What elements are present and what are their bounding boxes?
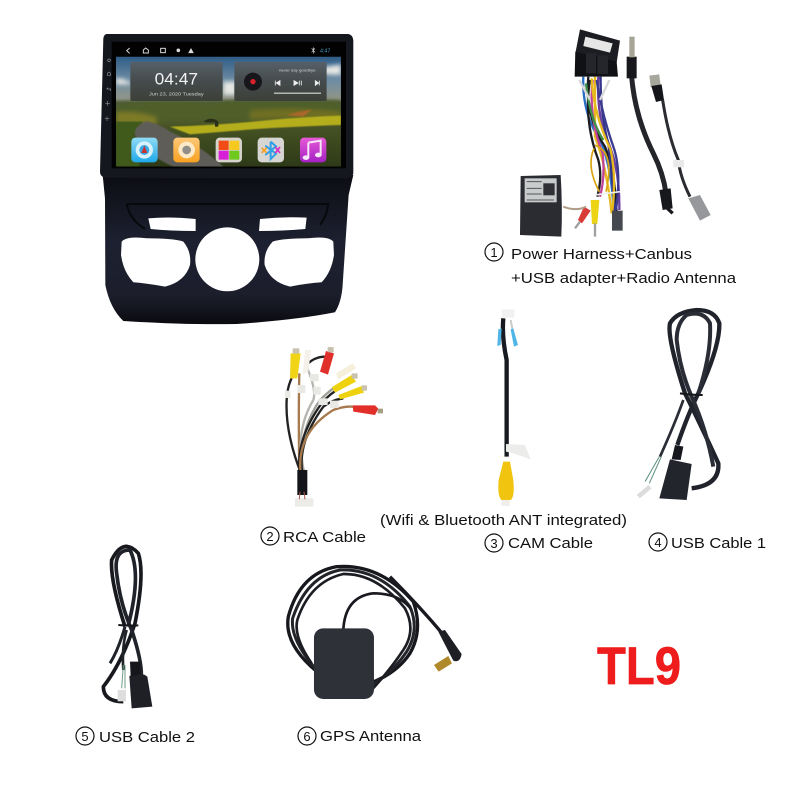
usb socket [129, 674, 152, 708]
base connector [295, 470, 313, 507]
connector labels [285, 374, 339, 408]
display frame [100, 34, 353, 178]
label 4: 4 [654, 535, 662, 550]
head unit with dash bezel [100, 34, 353, 324]
usb cable 2 [103, 546, 152, 708]
antenna puck [314, 628, 374, 699]
icon: navigation [131, 138, 158, 162]
label 4: USB Cable 1 [671, 535, 766, 552]
music widget [234, 62, 327, 101]
cam cable [497, 309, 531, 506]
rca cable [285, 347, 383, 507]
wallpaper [116, 57, 341, 167]
label 1: +USB adapter+Radio Antenna [511, 270, 737, 287]
label 3: CAM Cable [508, 535, 593, 552]
clock widget [130, 62, 223, 101]
label 5 [76, 727, 195, 746]
label 1: 1 [490, 245, 498, 260]
label 6 [298, 727, 422, 745]
harness wires [579, 77, 620, 213]
rca plugs on harness [563, 200, 623, 237]
label 5: USB Cable 2 [99, 729, 195, 746]
clock widget: 04:47 [155, 69, 198, 88]
label 2 [261, 527, 366, 546]
cable label [506, 444, 531, 459]
icon: apps [216, 138, 242, 162]
icon: bluetooth [258, 138, 284, 162]
status bar icons [127, 47, 315, 54]
model code: TL9 [597, 637, 681, 696]
label 6: GPS Antenna [320, 728, 422, 745]
label 4 [649, 533, 766, 552]
harness connector block [575, 29, 620, 77]
label 3 [485, 534, 593, 552]
status clock: 4:47 [320, 49, 330, 55]
clock widget: Jun 23, 2020 Tuesday [149, 91, 204, 96]
power harness set [520, 29, 711, 237]
gps antenna [288, 566, 462, 699]
side buttons [105, 59, 111, 121]
canbus box [520, 175, 562, 237]
label 5: 5 [81, 729, 89, 744]
label 1: Power Harness+Canbus [511, 246, 692, 263]
note: wifi and bluetooth: (Wifi & Bluetooth ANT integrated) [380, 512, 627, 529]
label 2: 2 [266, 529, 274, 544]
icon: settings [173, 138, 200, 162]
music widget: never say goodbye [279, 68, 316, 73]
cable loops [288, 566, 445, 690]
usb socket [659, 459, 692, 500]
icon: music [300, 138, 326, 162]
screen [112, 42, 346, 168]
lower dash panel [103, 175, 353, 324]
usb cable 1 [638, 310, 719, 500]
radio antenna cable [627, 37, 673, 213]
plugs [290, 347, 383, 415]
label 2: RCA Cable [283, 529, 366, 546]
tips [497, 328, 518, 347]
label 3: 3 [490, 536, 498, 551]
label 6: 6 [303, 729, 311, 744]
usb adapter cable [649, 74, 711, 221]
yellow plug [498, 462, 514, 500]
angled connector [438, 630, 462, 661]
label 1 [485, 243, 737, 287]
app icons [131, 138, 326, 162]
